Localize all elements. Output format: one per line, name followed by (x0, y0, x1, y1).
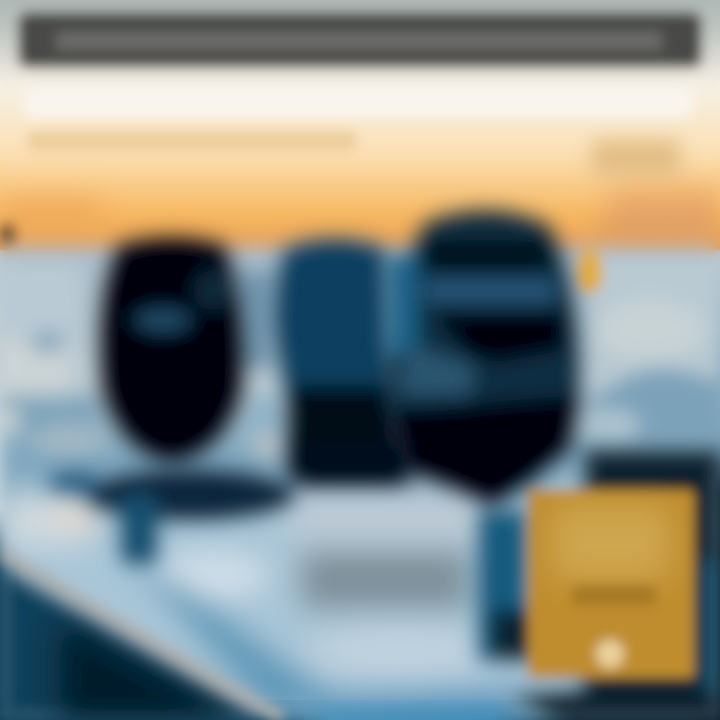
small note top right (592, 140, 680, 176)
boat gunwale (0, 552, 283, 720)
engine middle (274, 238, 398, 480)
dark teal right side (478, 450, 720, 720)
gold callout card (528, 490, 694, 678)
background: sunset orange side glow (0, 190, 720, 234)
engine left (99, 236, 243, 462)
callout text middle (572, 585, 656, 605)
title banner (18, 12, 702, 68)
subtitle band (24, 88, 692, 118)
lower ice field (0, 480, 720, 720)
engine bracket and mount (47, 440, 410, 565)
callout text upper (552, 505, 670, 580)
callout icon (596, 640, 624, 668)
engine right (384, 209, 581, 505)
boat hull (0, 565, 264, 720)
background: sunset sky (0, 0, 720, 255)
subheading text (28, 131, 356, 151)
background: icy water (0, 248, 720, 548)
horizon headland and gold marker (0, 222, 603, 294)
outboard engines (47, 209, 581, 565)
lower ice and boat deck (0, 450, 720, 720)
title text (56, 32, 662, 50)
